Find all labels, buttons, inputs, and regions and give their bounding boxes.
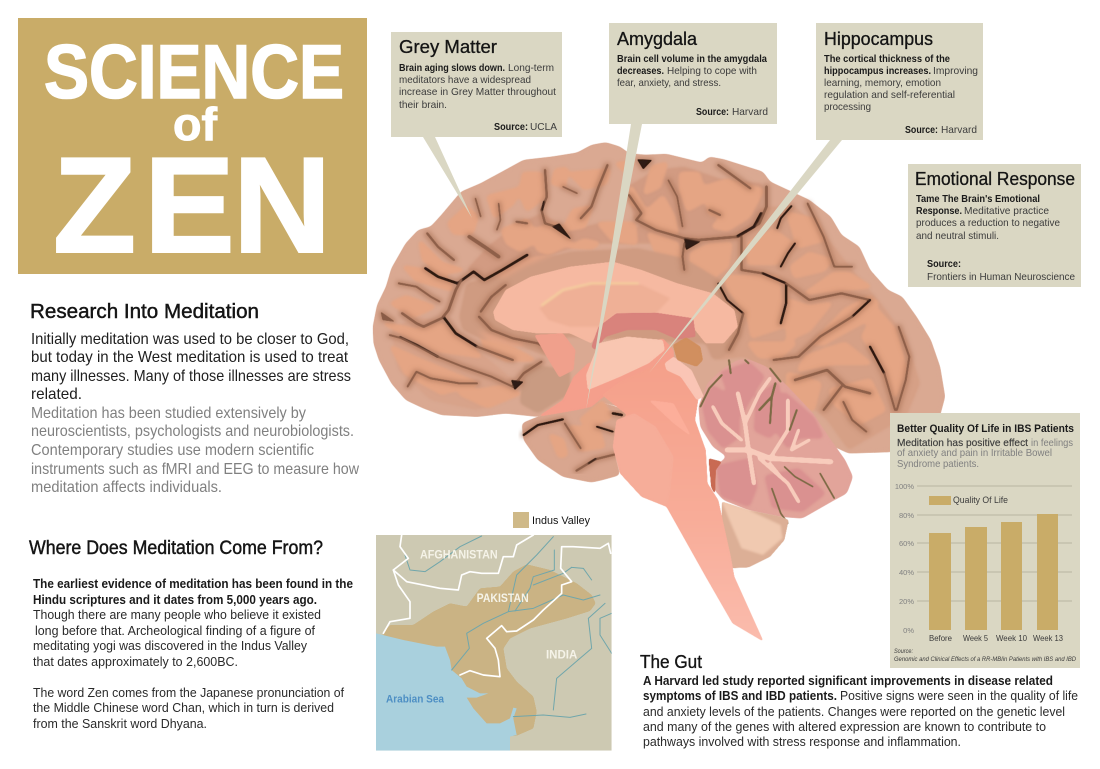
country labels: INDIA xyxy=(546,648,578,661)
borders xyxy=(383,535,611,677)
bar labels: Week 5 xyxy=(963,633,988,643)
bars xyxy=(929,514,1058,630)
limbic band xyxy=(459,248,741,360)
callout: emotional response xyxy=(908,164,1081,287)
source xyxy=(905,124,977,136)
pointer xyxy=(423,137,472,218)
section: research into meditation xyxy=(30,300,359,496)
temporal lobe xyxy=(522,400,634,482)
chart heading: Better Quality Of Life in IBS Patients xyxy=(897,423,1074,435)
body: fear, anxiety, and stress. xyxy=(617,77,721,89)
indus valley region xyxy=(382,564,596,738)
corpus callosum xyxy=(493,262,738,343)
chart description: of anxiety and pain in Irritable Bowel xyxy=(897,447,1052,459)
gridlines and axis labels xyxy=(895,482,1072,635)
body text: and many of the genes with altered expression are known to contribute to xyxy=(643,719,1046,734)
bar labels xyxy=(929,633,1063,643)
source: Source: xyxy=(494,121,528,133)
source xyxy=(494,121,557,133)
body xyxy=(824,53,978,113)
body text xyxy=(643,673,1078,749)
callout: hippocampus xyxy=(649,23,983,373)
heading: Research Into Meditation xyxy=(30,300,259,323)
heading: Grey Matter xyxy=(399,37,497,57)
source: Harvard xyxy=(941,124,977,136)
callout: grey matter xyxy=(391,32,562,218)
section: where does meditation come from xyxy=(29,538,353,731)
heading: Hippocampus xyxy=(824,29,933,49)
body: and neutral stimuli. xyxy=(916,230,999,242)
heading: Where Does Meditation Come From? xyxy=(29,538,323,559)
body text: the Middle Chinese word Chan, which in turn is derived xyxy=(33,700,334,715)
bar labels: Before xyxy=(929,633,952,643)
source: Harvard xyxy=(732,106,768,118)
chart source: Genomic and Clinical Effects of a RR-MBIin Patients with IBS and IBD xyxy=(894,657,1077,663)
section: the gut xyxy=(640,652,1078,749)
body text: long before that. Archeological finding of a figure of xyxy=(35,623,315,638)
amygdala xyxy=(673,337,703,367)
body text: meditating yogi was discovered in the Indus Valley xyxy=(33,638,307,653)
country labels xyxy=(386,549,578,705)
source: Frontiers in Human Neuroscience xyxy=(927,271,1075,283)
map of the Indus Valley xyxy=(376,535,612,751)
source xyxy=(927,258,1075,283)
bar labels: Week 13 xyxy=(1033,633,1063,643)
cortex xyxy=(373,142,945,453)
fornix band xyxy=(591,313,696,350)
body: produces a reduction to negative xyxy=(916,217,1060,229)
body text: Though there are many people who believe it existed xyxy=(33,607,321,622)
panel: quality of life chart xyxy=(890,413,1080,668)
pointer xyxy=(649,140,842,373)
body text: pathways involved with stress response and inflammation. xyxy=(643,734,961,749)
heading: The Gut xyxy=(640,652,702,672)
body text: A Harvard led study reported significant improvements in disease related xyxy=(643,673,1053,688)
body text: that dates approximately to 2,600BC. xyxy=(33,654,238,669)
body text: symptoms of IBS and IBD patients. xyxy=(643,688,837,703)
intro paragraph: but today in the West meditation is used to treat xyxy=(31,349,349,366)
chart description: Meditation has positive effect xyxy=(897,437,1028,449)
brainstem xyxy=(602,360,764,642)
chart source: Source: xyxy=(894,649,913,655)
source xyxy=(696,106,768,118)
body: processing xyxy=(824,101,871,113)
legend xyxy=(929,495,1008,506)
intro paragraph: related. xyxy=(31,386,82,403)
body: increase in Grey Matter throughout xyxy=(399,86,556,98)
country labels: Arabian Sea xyxy=(386,693,445,705)
source: UCLA xyxy=(530,121,557,133)
intro paragraph xyxy=(31,331,351,403)
title: of: of xyxy=(173,98,218,150)
body: Meditative practice xyxy=(964,205,1049,217)
heading: Amygdala xyxy=(617,29,698,49)
source: Source: xyxy=(927,258,961,270)
arabian sea xyxy=(376,633,517,751)
body: hippocampus increases. xyxy=(824,65,931,77)
pointer xyxy=(586,124,642,410)
body: decreases. xyxy=(617,65,664,77)
lower cerebellar base xyxy=(722,502,789,568)
grey paragraph: Contemporary studies use modern scientific xyxy=(31,442,314,459)
body: Tame The Brain's Emotional xyxy=(916,193,1040,205)
gridlines and axis labels: 40% xyxy=(899,568,914,577)
callout: amygdala xyxy=(586,23,777,410)
chart description xyxy=(897,437,1073,470)
country labels: AFGHANISTAN xyxy=(420,549,498,562)
heading: Emotional Response xyxy=(915,168,1075,189)
title block xyxy=(18,18,367,281)
hippocampus xyxy=(586,337,665,390)
intro paragraph: Initially meditation was used to be closer to God, xyxy=(31,331,349,348)
body: Helping to cope with xyxy=(667,65,757,77)
map legend: indus valley: Indus Valley xyxy=(532,515,590,527)
body text: The earliest evidence of meditation has been found in the xyxy=(33,576,353,591)
grey paragraph: meditation affects individuals. xyxy=(31,479,222,496)
cerebellum xyxy=(699,359,853,523)
body xyxy=(399,62,556,111)
body: Response. xyxy=(916,205,962,217)
title: Science: SCIENCE xyxy=(44,30,344,115)
rivers xyxy=(405,536,612,717)
body: regulation and self-referential xyxy=(824,89,955,101)
chart source xyxy=(894,649,1077,663)
bar labels: Week 10 xyxy=(996,633,1027,643)
grey paragraph: neuroscientists, psychologists and neurobiologists. xyxy=(31,423,354,440)
body text: Positive signs were seen in the quality of life xyxy=(840,688,1078,703)
gridlines and axis labels: 80% xyxy=(899,511,914,520)
body: learning, memory, emotion xyxy=(824,77,941,89)
title: Zen: ZEN xyxy=(53,129,331,281)
source: Source: xyxy=(905,124,938,136)
body xyxy=(617,53,767,89)
body xyxy=(916,193,1060,242)
body text: and anxiety levels of the patients. Changes were reported on the genetic level xyxy=(643,704,1065,719)
intro paragraph: many illnesses. Many of those illnesses are stress xyxy=(31,368,351,385)
body: Brain cell volume in the amygdala xyxy=(617,53,767,65)
country labels: PAKISTAN xyxy=(477,592,529,605)
body: meditators have a widespread xyxy=(399,74,531,86)
hypothalamus area xyxy=(534,333,674,417)
grey paragraph: instruments such as fMRI and EEG to measure how xyxy=(31,461,359,478)
body text: from the Sanskrit word Dhyana. xyxy=(33,716,207,731)
chart description: Syndrome patients. xyxy=(897,458,979,470)
body: Improving xyxy=(933,65,978,77)
body: The cortical thickness of the xyxy=(824,53,950,65)
chart description: in feelings xyxy=(1031,437,1073,449)
gridlines and axis labels: 20% xyxy=(899,597,914,606)
body: Long-term xyxy=(508,62,554,74)
body: Brain aging slows down. xyxy=(399,62,505,74)
body text: The word Zen comes from the Japanese pronunciation of xyxy=(33,685,344,700)
brainstem highlights xyxy=(613,357,722,507)
grey paragraph xyxy=(31,405,359,496)
gridlines and axis labels: 0% xyxy=(903,626,914,635)
sulci xyxy=(381,159,909,432)
legend: Quality Of Life xyxy=(953,495,1008,506)
map legend: indus valley xyxy=(513,512,590,528)
source: Source: xyxy=(696,106,729,118)
gridlines and axis labels: 100% xyxy=(895,482,914,491)
body text: Hindu scriptures and it dates from 5,000 years ago. xyxy=(33,592,317,607)
brain illustration xyxy=(373,142,945,642)
gyri highlights xyxy=(384,162,906,423)
gridlines and axis labels: 60% xyxy=(899,539,914,548)
body: their brain. xyxy=(399,99,447,111)
body text xyxy=(33,576,353,731)
grey paragraph: Meditation has been studied extensively by xyxy=(31,405,306,422)
